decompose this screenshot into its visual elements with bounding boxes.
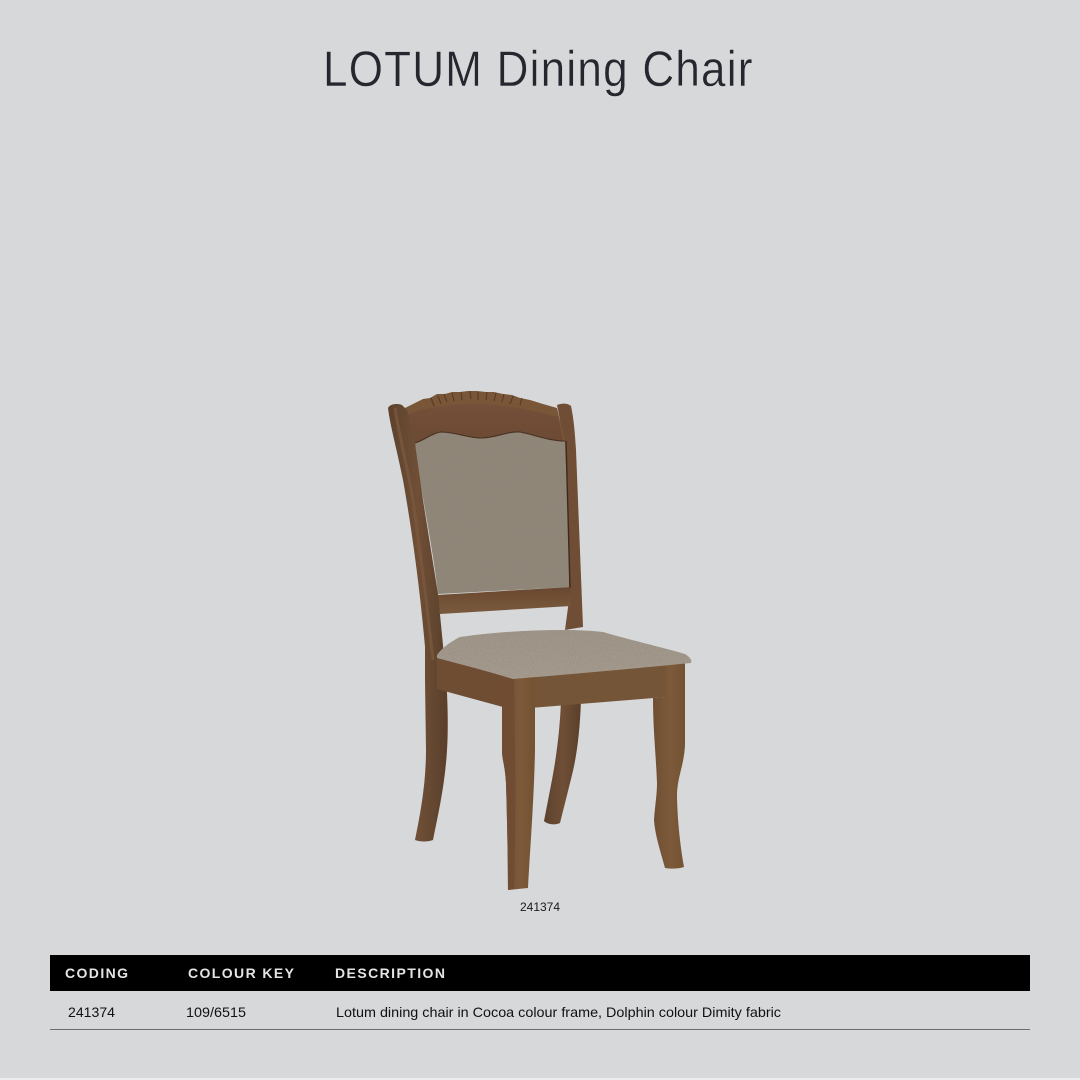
image caption: product code: 241374	[520, 900, 560, 914]
panel top edge	[415, 432, 565, 443]
title: LOTUM Dining Chair	[323, 40, 752, 97]
cell: colour key: 109/6515	[186, 1004, 246, 1020]
right stile inner shadow	[566, 441, 570, 588]
stile highlight	[395, 408, 433, 660]
bottom edge strip	[0, 1078, 1080, 1080]
front leg shaded face	[502, 675, 515, 890]
header: coding: CODING	[65, 965, 128, 981]
left back stile and rear leg	[388, 404, 448, 842]
side seat apron	[437, 654, 513, 707]
header: colour key: COLOUR KEY	[188, 965, 295, 981]
cell: code: 241374	[68, 1004, 115, 1020]
crest and top rail	[405, 391, 566, 448]
seat cushion	[437, 630, 691, 679]
top rail face	[408, 404, 564, 448]
front right leg	[653, 660, 685, 869]
back upholstery panel	[415, 432, 569, 594]
cell: description: Lotum dining chair in Cocoa colour frame, Dolphin colour Dimity fabric	[336, 1004, 781, 1020]
product image: dining chair	[388, 391, 691, 890]
crest carving marks	[431, 391, 522, 406]
front seat apron	[530, 660, 666, 708]
front centre leg	[502, 675, 535, 890]
lower back rail	[437, 587, 571, 614]
right back stile	[557, 404, 583, 630]
table header bar	[50, 955, 1030, 991]
back right leg	[544, 700, 581, 824]
table	[50, 955, 1030, 1030]
header: description: DESCRIPTION	[335, 965, 445, 981]
